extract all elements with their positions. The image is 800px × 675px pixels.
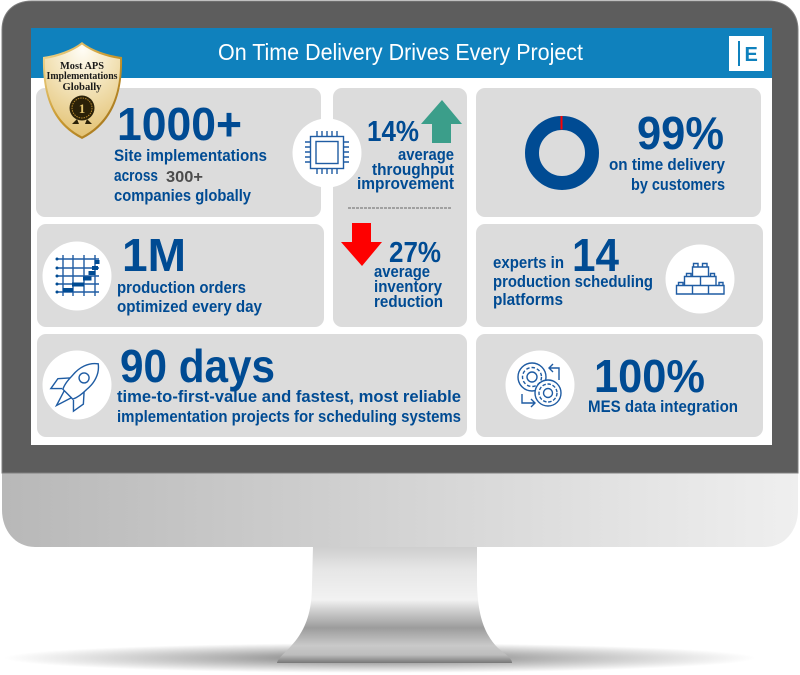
logo: E <box>744 44 758 66</box>
description: time to first value: time-to-first-value and fastest, most reliable <box>117 388 461 406</box>
description: site implementations <box>114 147 267 205</box>
badge text: Most APS <box>60 60 104 72</box>
description: time to first value <box>117 388 461 426</box>
monitor bezel <box>2 1 798 473</box>
description: MES data integration: MES data integration <box>588 398 738 416</box>
description: on time delivery <box>609 156 726 194</box>
stat: 14%: 14% <box>367 116 419 148</box>
icon: down arrow <box>341 223 382 266</box>
panel: throughput and inventory <box>333 88 467 327</box>
donut chart <box>532 116 592 183</box>
description: scheduling experts: platforms <box>493 291 563 309</box>
description: on time delivery: on time delivery <box>609 156 726 174</box>
monitor stand <box>277 546 512 663</box>
screen <box>31 28 772 445</box>
icon: processor chip <box>292 118 362 188</box>
description: scheduling experts <box>493 254 653 309</box>
description: production orders: production orders <box>117 279 246 297</box>
description: production orders <box>117 279 263 316</box>
description: throughput: improvement <box>357 175 454 193</box>
description: scheduling experts: production scheduling <box>493 273 653 291</box>
description: on time delivery: by customers <box>631 176 725 194</box>
panel: 99% on time delivery <box>476 88 761 217</box>
stat: 27%: 27% <box>389 237 441 269</box>
badge text: Globally <box>62 81 102 93</box>
icon: up arrow <box>421 100 462 143</box>
description: production orders: optimized every day <box>117 298 263 316</box>
icon: gears <box>506 350 574 420</box>
description: inventory: inventory <box>374 278 443 296</box>
logo <box>729 36 764 71</box>
panel: 90 days <box>37 334 467 437</box>
stat: 1M: 1M <box>122 229 186 281</box>
description: site implementations: 300+ <box>166 169 203 186</box>
stat: 100%: 100% <box>594 350 705 402</box>
panel: 100% MES data integration <box>476 334 763 437</box>
stat: 99%: 99% <box>637 107 724 159</box>
description: site implementations: across <box>114 167 158 185</box>
title: On Time Delivery Drives Every Project <box>218 39 584 65</box>
stat: 90 days: 90 days <box>120 340 275 392</box>
stat: 14: 14 <box>572 229 619 281</box>
description: inventory: average <box>374 263 430 281</box>
header <box>31 28 772 78</box>
badge text <box>46 60 118 93</box>
description: throughput: throughput <box>372 161 454 179</box>
icon: building blocks <box>666 244 734 314</box>
panel: 1000+ implementations <box>36 88 321 217</box>
description: scheduling experts: experts in <box>493 254 564 272</box>
stat: 1000+: 1000+ <box>117 98 242 150</box>
description: time to first value: implementation projects for scheduling systems <box>117 408 461 426</box>
description: throughput <box>357 146 454 193</box>
badge medal: 1 <box>79 101 85 116</box>
badge text: Implementations <box>46 71 118 82</box>
panel: 1M production orders <box>37 224 324 327</box>
description: inventory <box>374 263 443 311</box>
desk shadow <box>4 643 756 673</box>
description: site implementations: companies globally <box>114 187 252 205</box>
icon: gantt chart <box>42 242 112 310</box>
description: inventory: reduction <box>374 293 443 311</box>
icon: rocket <box>42 350 112 420</box>
panel: 14 scheduling platforms <box>476 224 763 327</box>
description: site implementations: Site implementations <box>114 147 267 165</box>
monitor chin <box>2 473 798 547</box>
badge: most APS implementations <box>43 42 122 139</box>
description: throughput: average <box>398 146 454 164</box>
